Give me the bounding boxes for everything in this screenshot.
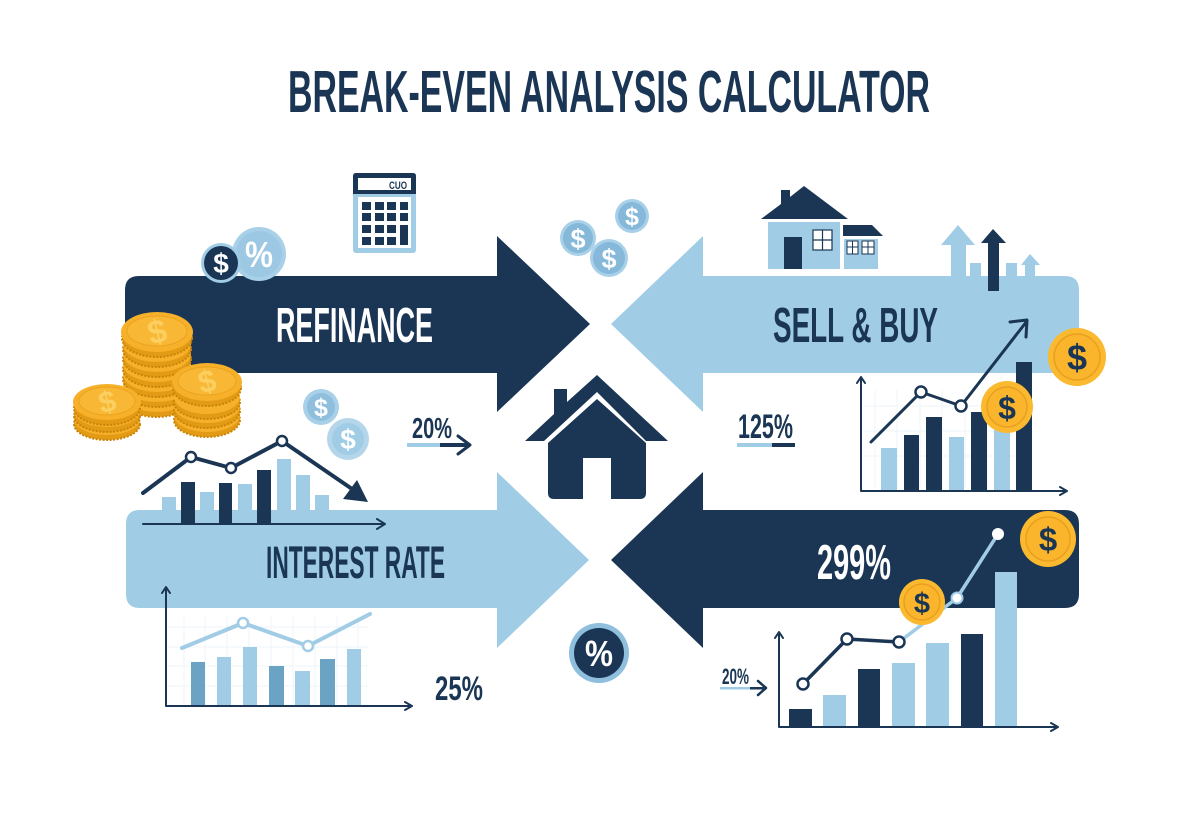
icon: rising arrows — [941, 225, 1040, 291]
arrow: 299 percent — [611, 472, 1079, 648]
icon: gold coin stacks — [73, 311, 242, 440]
chart: 299 percent growth — [775, 511, 1076, 731]
chart: refinance bars and falling line — [143, 436, 385, 529]
callout: 20 percent left: 20% — [412, 413, 452, 445]
icon: small dollar coins left — [303, 389, 369, 460]
chart: sell and buy growth — [857, 320, 1106, 495]
icon: dollar coins top centre: $ — [625, 203, 639, 231]
coin: large — [1048, 328, 1106, 386]
coin: top right — [1020, 511, 1076, 567]
icon: small dollar coins left: $ — [314, 394, 328, 422]
icon: percent and dollar badges — [201, 227, 286, 283]
icon: sell and buy house — [761, 186, 883, 269]
coin: middle: $ — [914, 588, 930, 620]
callout: 25 percent: 25% — [435, 670, 483, 708]
arrow: refinance — [125, 236, 590, 412]
callout: 20 percent right: 20% — [722, 664, 749, 689]
coin stack: centre — [121, 311, 193, 417]
icon: calculator — [353, 173, 416, 253]
icon: dollar coins top centre: $ — [601, 244, 617, 274]
icon: percent badge — [569, 623, 629, 683]
coin stack: left: $ — [95, 384, 120, 420]
arrow: sell and buy — [611, 236, 1079, 412]
arrow: interest rate — [126, 472, 589, 648]
icon: dollar coins top centre: $ — [570, 224, 586, 254]
icon: small dollar coins left: $ — [340, 424, 356, 455]
icon: calculator: CUO — [389, 180, 407, 192]
coin stack: right: $ — [195, 362, 220, 401]
coin: middle — [899, 579, 945, 625]
coin: small: $ — [998, 390, 1016, 426]
coin: top right: $ — [1039, 521, 1057, 558]
coin: large: $ — [1067, 337, 1087, 378]
coin stack: right — [172, 362, 242, 437]
icon: central house — [525, 375, 668, 499]
chart: interest rate — [162, 587, 412, 710]
callout: 125 percent — [737, 408, 795, 447]
icon: percent and dollar badges: $ — [213, 248, 229, 279]
icon: percent and dollar badges: % — [245, 234, 273, 275]
icon: percent badge: % — [585, 633, 613, 674]
coin: small — [981, 381, 1033, 433]
callout: 125 percent: 125% — [738, 408, 793, 446]
label: 299 percent: 299% — [817, 536, 891, 590]
icon: dollar coins top centre — [560, 199, 649, 277]
coin stack: centre: $ — [144, 311, 171, 352]
label: interest rate: INTEREST RATE — [266, 537, 445, 588]
label: sell and buy: SELL & BUY — [773, 299, 938, 353]
label: refinance: REFINANCE — [276, 299, 433, 353]
coin stack: left — [73, 384, 141, 440]
